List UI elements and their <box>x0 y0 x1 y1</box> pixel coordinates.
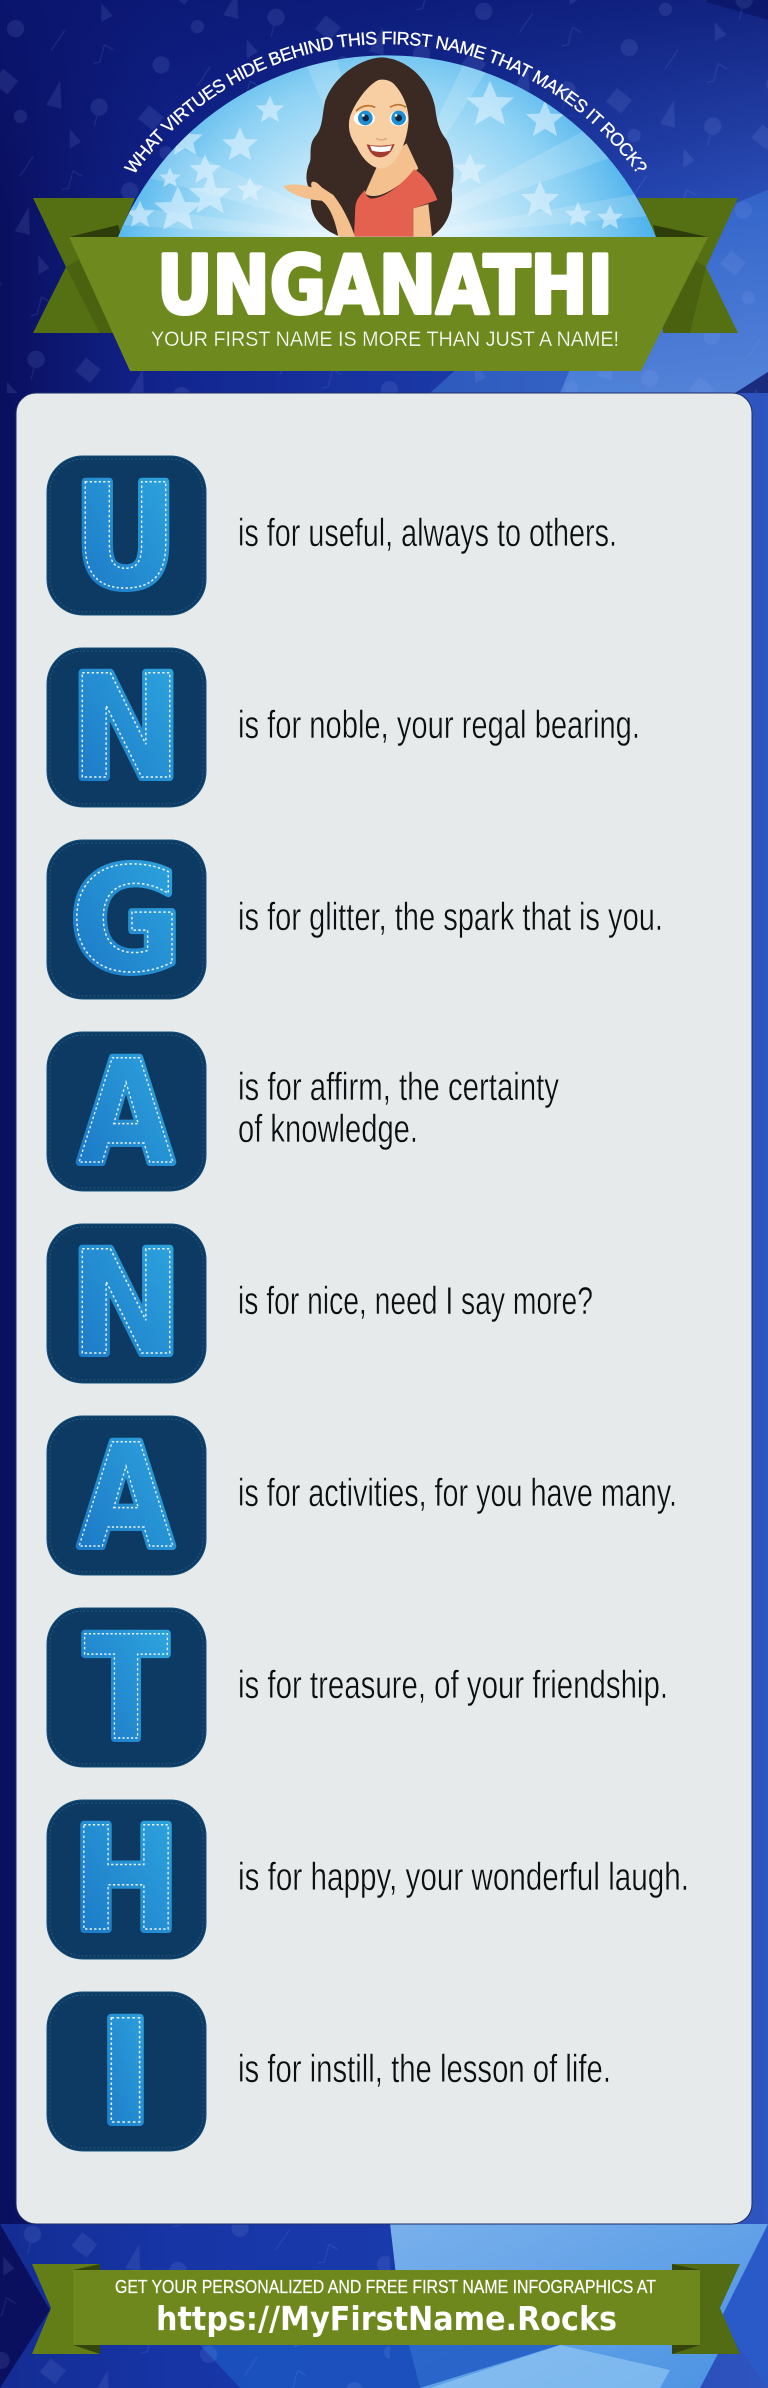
footer tails <box>32 2264 740 2354</box>
row G: G <box>70 837 182 1004</box>
row I: I <box>98 1989 154 2156</box>
illustration dome <box>110 50 670 240</box>
row N second <box>47 1220 593 1387</box>
footer URL: https://MyFirstName.Rocks <box>156 2299 617 2338</box>
shirt <box>354 169 437 237</box>
row T: T <box>84 1605 168 1772</box>
row N second: N <box>70 1220 182 1387</box>
row H: H <box>72 1796 180 1963</box>
row I <box>47 1989 611 2156</box>
row A: is for affirm, the certainty <box>238 1066 559 1109</box>
row N <box>47 644 640 811</box>
arm and hand <box>283 182 355 237</box>
footer line 1: GET YOUR PERSONALIZED AND FREE FIRST NAME INFOGRAPHICS AT <box>115 2277 656 2297</box>
row U: is for useful, always to others. <box>238 512 617 555</box>
row U <box>47 453 617 620</box>
row H: H <box>72 1796 180 1963</box>
row I: is for instill, the lesson of life. <box>238 2048 611 2091</box>
row A second <box>47 1413 677 1580</box>
row G <box>47 837 663 1004</box>
woman illustration <box>283 57 453 237</box>
panel: letters <box>16 393 752 2224</box>
row U: U <box>74 453 178 620</box>
main ribbon <box>69 237 708 371</box>
footer ribbon <box>32 2264 740 2354</box>
row T: T <box>84 1605 168 1772</box>
title: UNGANATHI <box>157 239 613 332</box>
nose <box>376 138 387 140</box>
mouth <box>367 144 395 157</box>
right arm <box>413 204 432 237</box>
curved tagline: WHAT VIRTUES HIDE BEHIND THIS FIRST NAME THAT MAKES IT ROCK? <box>124 32 647 172</box>
row A <box>47 1029 559 1196</box>
row N: N <box>70 644 182 811</box>
row U: U <box>74 453 178 620</box>
subtitle: YOUR FIRST NAME IS MORE THAN JUST A NAME! <box>151 328 619 351</box>
row N second: N <box>70 1220 182 1387</box>
row G: G <box>70 837 182 1004</box>
row I: I <box>98 1989 154 2156</box>
ribbon tails: header <box>33 198 738 333</box>
row N: N <box>70 644 182 811</box>
hair <box>306 57 453 237</box>
face <box>349 80 409 169</box>
row A: A <box>78 1029 174 1196</box>
eyes <box>354 105 408 126</box>
row A: A <box>78 1029 174 1196</box>
row H <box>47 1796 689 1963</box>
footer band <box>73 2270 700 2345</box>
row N: is for noble, your regal bearing. <box>238 704 640 747</box>
row A: of knowledge. <box>238 1108 418 1151</box>
row N second: is for nice, need I say more? <box>238 1280 593 1323</box>
neck and chest <box>365 143 418 196</box>
row T <box>47 1605 668 1772</box>
row A second: A <box>78 1413 174 1580</box>
row A second: A <box>78 1413 174 1580</box>
